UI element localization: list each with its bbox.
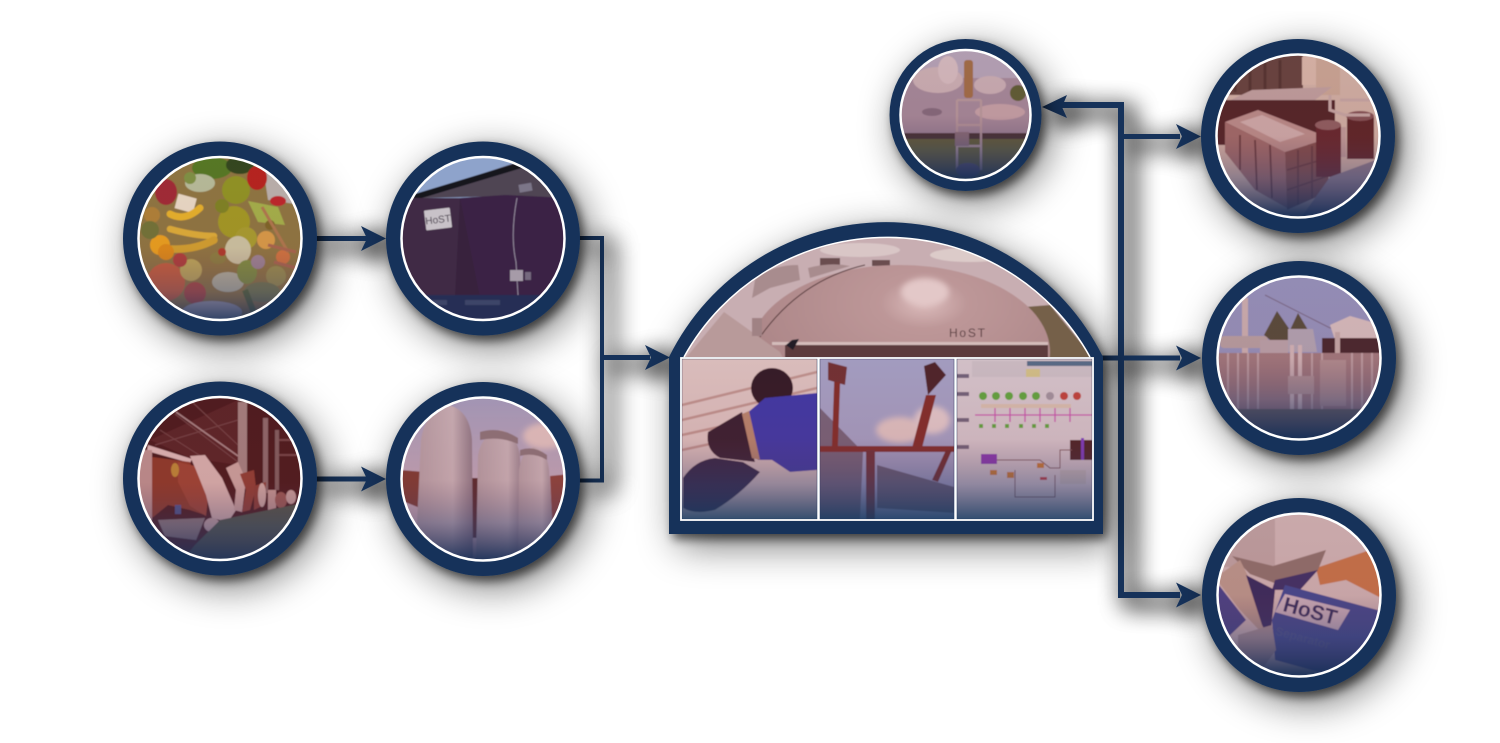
photo: digester dome [684,238,1089,357]
arrow connectors [315,95,1201,608]
node: gas upgrading container [1201,39,1395,233]
logo: dome HoST mark: HoST [949,326,986,340]
arrow trunk and branches: digester to outputs [1042,95,1201,608]
node: storage silos [386,382,580,576]
node: dairy cows [123,382,317,576]
photo: blue pipe panel [682,359,817,519]
node: separator [1202,498,1396,692]
label: separator plate: Separator [1274,624,1332,652]
logo: separator HoST plate: HoST [1281,593,1340,630]
node: CHP container [1202,261,1396,455]
bracket arrow: feedstock into digester [578,236,670,482]
panel: central digester [669,222,1103,534]
node: reception tank [386,142,580,336]
logo: tank HoST plate [424,207,452,231]
node: gas flare [890,39,1042,191]
node: food waste feedstock [123,142,317,336]
arrow: food waste to reception tank [315,226,386,251]
photo: stirrer brackets panel [820,359,954,519]
arrow: manure to silos [315,466,386,492]
logo: tank HoST plate: HoST [425,213,452,228]
photo frames [681,237,1093,520]
photo: SCADA screen panel [957,359,1092,519]
